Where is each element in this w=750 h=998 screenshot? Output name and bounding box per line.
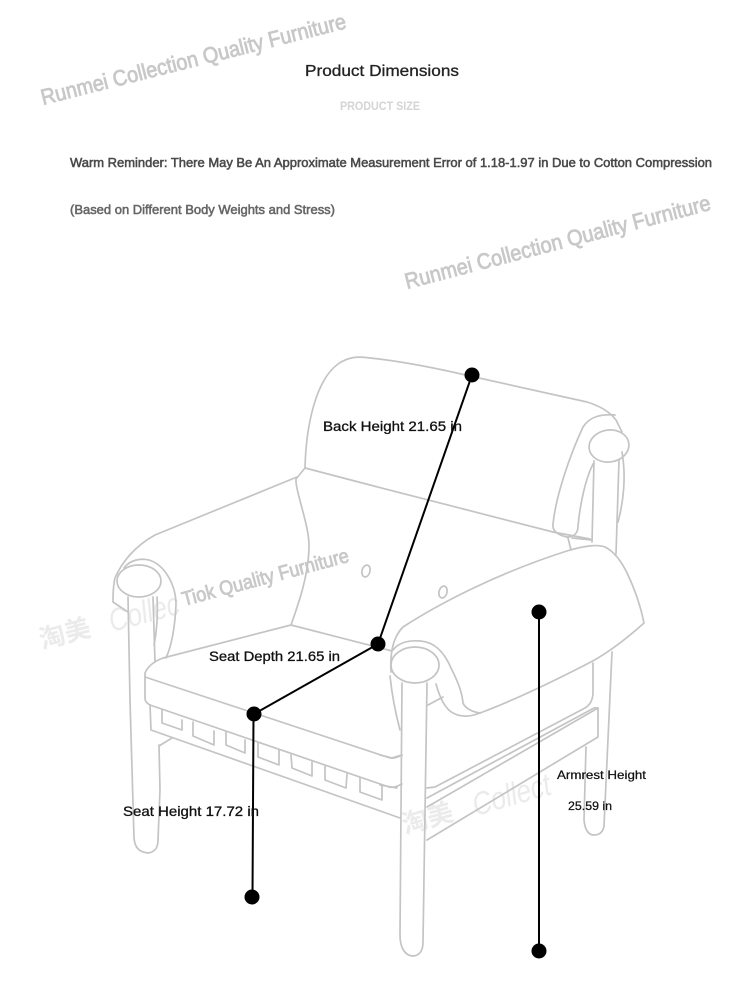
watermark: chinese lower: 淘美 <box>398 797 457 840</box>
watermark: chinese left: 淘美 <box>36 612 94 655</box>
label: armrest height value: 25.59 in <box>568 799 612 813</box>
note text: (Based on Different Body Weights and Stress) <box>70 202 335 217</box>
title: Product Dimensions <box>305 63 459 80</box>
dimension line: seat height <box>244 714 260 904</box>
right arm <box>390 546 644 730</box>
side rail <box>380 663 598 840</box>
watermark: chinese left <box>36 585 183 655</box>
subtitle: PRODUCT SIZE <box>340 99 420 113</box>
seat tabs <box>162 710 382 800</box>
dimension line: back height <box>370 368 480 652</box>
warm reminder text: Warm Reminder: There May Be An Approximate Measurement Error of 1.18-1.97 in Due to Cotton Compression <box>70 155 712 170</box>
back right leg and post <box>584 427 631 835</box>
label: armrest height: Armrest Height <box>557 768 647 782</box>
front right leg <box>400 683 443 956</box>
watermark: right: Runmei Collection Quality Furniture <box>402 190 713 294</box>
label: seat depth: Seat Depth 21.65 in <box>209 648 340 664</box>
seat cushion <box>145 625 402 818</box>
left arm <box>113 468 309 853</box>
watermark: chinese lower: Collect <box>468 766 556 823</box>
watermark: tiok: Tiok Quality Furniture <box>180 545 351 611</box>
watermark: chinese left: Collec <box>104 585 183 639</box>
watermark: top left: Runmei Collection Quality Furniture <box>38 9 349 110</box>
chair line drawing <box>113 357 644 956</box>
dimension line: seat depth <box>246 644 378 722</box>
dimension line: armrest height <box>532 604 546 958</box>
label: back height: Back Height 21.65 in <box>323 418 462 434</box>
watermark: chinese lower <box>398 766 556 840</box>
back cushion <box>305 357 622 599</box>
label: seat height: Seat Height 17.72 in <box>123 803 259 819</box>
